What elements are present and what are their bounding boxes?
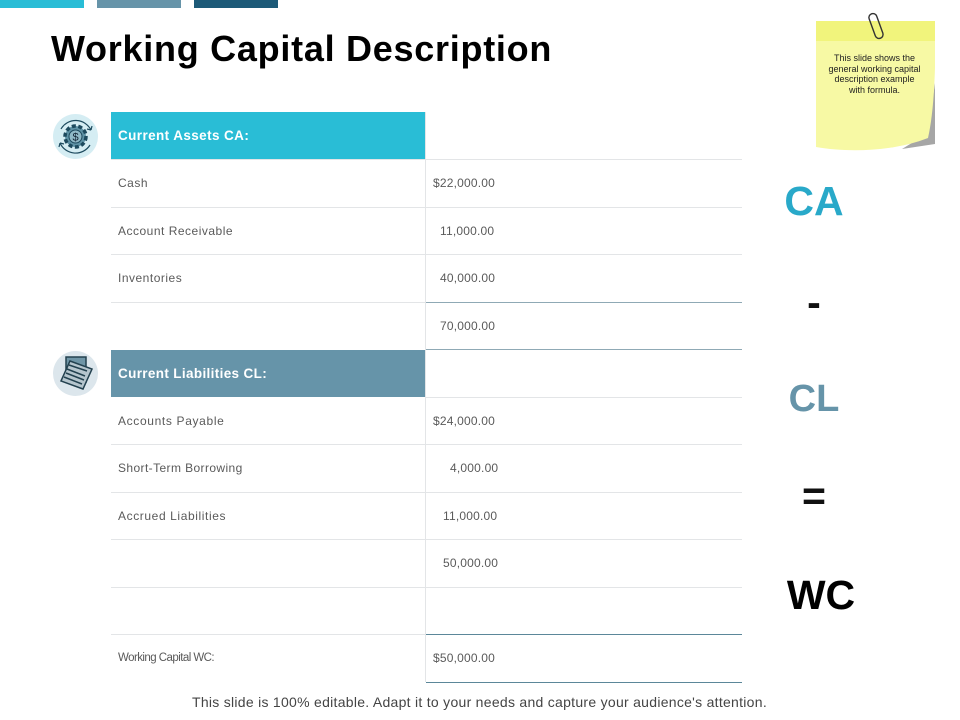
icon: gear with dollar: $ bbox=[72, 132, 79, 144]
sticky note: with formula. bbox=[849, 85, 900, 95]
icon: documents bbox=[53, 351, 98, 396]
table: working capital: Short-Term Borrowing bbox=[118, 461, 243, 475]
table: working capital: 11,000.00 bbox=[443, 509, 497, 523]
table: working capital: 70,000.00 bbox=[440, 319, 495, 333]
icon: gear with dollar bbox=[53, 114, 98, 159]
table: working capital: $24,000.00 bbox=[433, 414, 495, 428]
formula: minus: - bbox=[807, 279, 821, 325]
top accent bars bbox=[0, 0, 278, 8]
sticky note: This slide shows the bbox=[834, 53, 915, 63]
title: Working Capital Description bbox=[51, 28, 552, 69]
footer note: This slide is 100% editable. Adapt it to your needs and capture your audience's attention. bbox=[192, 694, 767, 710]
header: current assets bbox=[111, 112, 425, 160]
table: working capital: 11,000.00 bbox=[440, 224, 494, 238]
table: working capital bbox=[111, 112, 742, 683]
table: working capital: Accounts Payable bbox=[118, 414, 224, 428]
header: current liabilities: Current Liabilities CL: bbox=[118, 366, 267, 381]
table: working capital: Inventories bbox=[118, 271, 182, 285]
table: working capital: 4,000.00 bbox=[450, 461, 498, 475]
table: working capital: $50,000.00 bbox=[433, 651, 495, 665]
formula: CA: CA bbox=[784, 178, 844, 224]
table: working capital: Account Receivable bbox=[118, 224, 233, 238]
table: working capital: Working Capital WC: bbox=[118, 652, 214, 664]
header: current liabilities bbox=[111, 350, 425, 397]
sticky note bbox=[816, 12, 935, 150]
table: working capital: Accrued Liabilities bbox=[118, 509, 226, 523]
table: working capital: 40,000.00 bbox=[440, 271, 495, 285]
sticky note: description example bbox=[834, 74, 915, 84]
sticky note: general working capital bbox=[828, 64, 921, 74]
formula: CL: CL bbox=[789, 378, 839, 420]
table: working capital: Cash bbox=[118, 176, 148, 190]
table: working capital: 50,000.00 bbox=[443, 556, 498, 570]
header: current assets: Current Assets CA: bbox=[118, 128, 249, 143]
table: working capital: $22,000.00 bbox=[433, 176, 495, 190]
formula: WC: WC bbox=[787, 572, 855, 618]
formula: equals: = bbox=[802, 473, 826, 519]
